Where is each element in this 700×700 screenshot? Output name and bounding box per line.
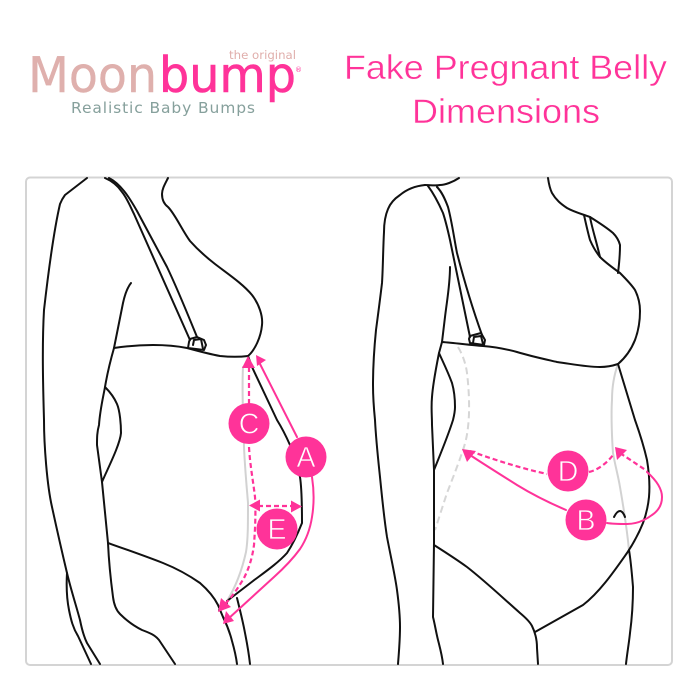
badge B: B	[576, 505, 596, 537]
panel frame	[26, 178, 672, 665]
title: Dimensions	[412, 93, 600, 131]
logo subtitle: Realistic Baby Bumps	[71, 99, 255, 117]
figure: right side view	[373, 178, 662, 664]
measurement A: solid curved line and arrows	[223, 355, 314, 624]
badge A	[286, 436, 326, 478]
badge E	[256, 508, 298, 550]
logo word: bump: bump	[159, 47, 296, 104]
measurement C: dashed line and arrows	[218, 356, 255, 612]
logo registered mark: ®	[295, 66, 302, 74]
measurement B: solid curved line	[470, 455, 662, 524]
badge C: C	[239, 408, 259, 440]
logo: Moonbump	[28, 47, 302, 117]
title: Fake Pregnant Belly	[344, 49, 667, 87]
measurement D: dashed curved line and arrows	[462, 447, 647, 474]
badge D: D	[558, 456, 578, 488]
badge B	[566, 500, 606, 540]
badge A: A	[296, 442, 316, 474]
left figure outline	[43, 178, 302, 664]
badge E: E	[267, 514, 287, 546]
right figure outline	[373, 178, 649, 664]
title	[344, 49, 667, 131]
logo word: Moon: Moon	[28, 47, 157, 104]
badge D	[548, 450, 588, 492]
measurement E: dashed double arrow	[249, 500, 302, 512]
badge C	[228, 403, 270, 444]
logo tagline: the original: the original	[229, 48, 296, 62]
figure: left side view	[43, 178, 326, 664]
